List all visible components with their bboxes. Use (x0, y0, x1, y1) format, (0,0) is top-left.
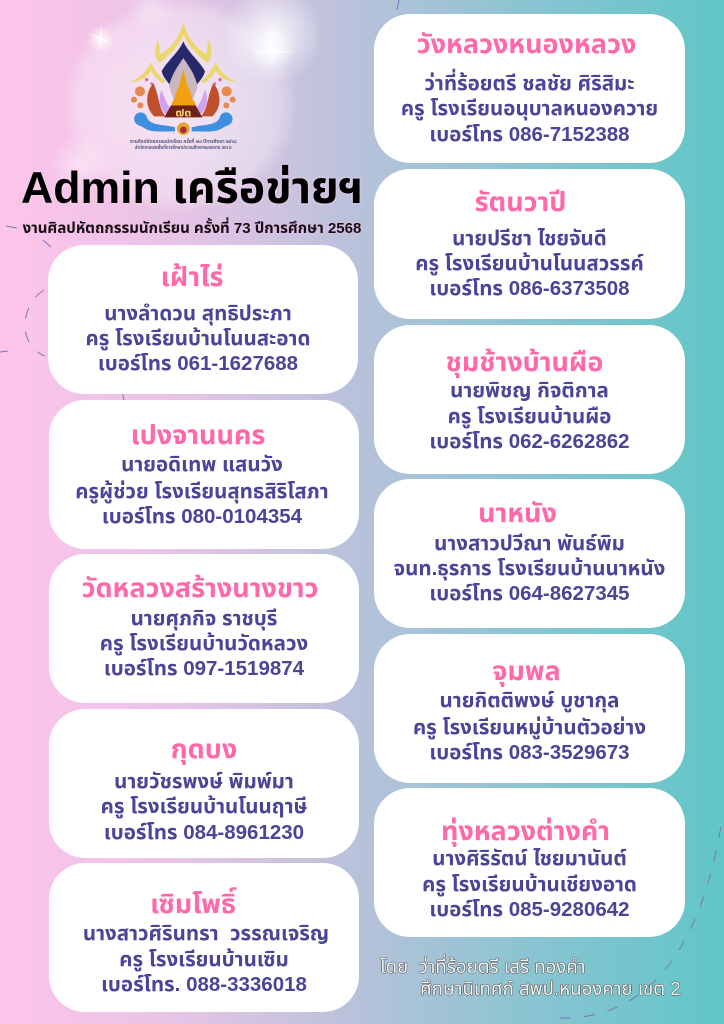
card: ทุ่งหลวงต่างคำ: นางศิริรัตน์ ไชยมานันต์ (432, 847, 627, 870)
card: เซิมโพธิ์ (49, 863, 359, 1012)
flowers (131, 86, 236, 108)
card: จุมพล: เบอร์โทร 083-3529673 (429, 741, 630, 764)
card: รัตนวาปี: รัตนวาปี (475, 187, 566, 217)
credit: author: โดย ว่าที่ร้อยตรี เสรี ทองคำ (380, 956, 585, 977)
subtitle: งานศิลปหัตถกรรมนักเรียน ครั้งที่ 73 ปีการศึกษา 2568 (23, 220, 361, 237)
card: เปงจานนคร: ครูผู้ช่วย โรงเรียนสุทธสิริโสภา (75, 480, 329, 503)
card: วัดหลวงสร้างนางขาว: เบอร์โทร 097-1519874 (104, 657, 304, 680)
card: เฝ้าไร่: เบอร์โทร 061-1627688 (98, 352, 298, 375)
emblem (177, 122, 190, 135)
card: จุมพล (374, 634, 685, 783)
card: เฝ้าไร่ (48, 245, 358, 394)
card: ชุมช้างบ้านผือ: เบอร์โทร 062-6262862 (429, 430, 630, 453)
card: นาหนัง (374, 479, 685, 628)
card: วังหลวงหนองหลวง: วังหลวงหนองหลวง (417, 29, 636, 59)
logo caption: งานศิลปหัตถกรรมนักเรียน ครั้งที่ ๗๓ ปีการศึกษา ๒๕๖๘ (130, 138, 237, 145)
card: กุดบง: ครู โรงเรียนบ้านโนนฤาษี (101, 795, 307, 818)
card: นาหนัง: นาหนัง (478, 498, 557, 528)
card: ทุ่งหลวงต่างคำ (374, 788, 685, 937)
card: นาหนัง: เบอร์โทร 064-8627345 (429, 582, 630, 605)
card: วังหลวงหนองหลวง: ว่าที่ร้อยตรี ชลชัย ศิริสิมะ (424, 72, 635, 95)
card: รัตนวาปี: เบอร์โทร 086-6373508 (429, 277, 630, 300)
card: เปงจานนคร: นายอดิเทพ แสนวัง (121, 453, 283, 476)
card: นาหนัง: จนท.ธุรการ โรงเรียนบ้านนาหนัง (394, 557, 665, 580)
card: กุดบง (49, 709, 359, 858)
card: เปงจานนคร: เปงจานนคร (131, 420, 265, 450)
card: เฝ้าไร่: นางลำดวน สุทธิประภา (104, 302, 292, 325)
gold roof (155, 21, 211, 63)
card: เซิมโพธิ์: เซิมโพธิ์ (150, 889, 236, 919)
card: เฝ้าไร่: เฝ้าไร่ (161, 262, 223, 292)
card: จุมพล: ครู โรงเรียนหมู่บ้านตัวอย่าง (413, 716, 646, 739)
gray ornament (169, 58, 198, 103)
card: เซิมโพธิ์: นางสาวศิรินทรา วรรณเจริญ (83, 922, 329, 945)
lotus leaves (147, 83, 219, 116)
credit: author (380, 954, 681, 999)
navy roof (162, 41, 205, 86)
card: เฝ้าไร่: ครู โรงเรียนบ้านโนนสะอาด (86, 327, 310, 350)
card: ทุ่งหลวงต่างคำ: ครู โรงเรียนบ้านเชียงอาด (422, 873, 637, 896)
base (164, 105, 202, 117)
card: ชุมช้างบ้านผือ (374, 325, 685, 474)
card: ชุมช้างบ้านผือ: นายพิชญ กิจติกาล (450, 379, 609, 402)
purple crescents (160, 90, 207, 115)
card: วัดหลวงสร้างนางขาว: วัดหลวงสร้างนางขาว (82, 573, 318, 603)
base numerals: ๗๓ (175, 105, 191, 119)
card: ชุมช้างบ้านผือ: ชุมช้างบ้านผือ (446, 347, 603, 377)
card: รัตนวาปี (374, 169, 685, 319)
credit: author: ศึกษานิเทศก์ สพป.หนองคาย เขต 2 (420, 978, 681, 999)
card: รัตนวาปี: นายปรีชา ไชยจันดี (452, 227, 607, 250)
card: เซิมโพธิ์: ครู โรงเรียนบ้านเซิม (119, 948, 289, 971)
title: Admin เครือข่ายฯ (21, 164, 363, 213)
card: เปงจานนคร: เบอร์โทร 080-0104354 (102, 505, 302, 528)
card: วัดหลวงสร้างนางขาว: ครู โรงเรียนบ้านวัดหลวง (100, 632, 308, 655)
card: จุมพล: นายกิตติพงษ์ บูชากุล (440, 689, 619, 712)
card: ทุ่งหลวงต่างคำ: ทุ่งหลวงต่างคำ (441, 816, 610, 846)
card: ชุมช้างบ้านผือ: ครู โรงเรียนบ้านผือ (448, 405, 611, 428)
card: วังหลวงหนองหลวง (374, 14, 685, 163)
card: รัตนวาปี: ครู โรงเรียนบ้านโนนสวรรค์ (415, 252, 644, 275)
card: วัดหลวงสร้างนางขาว (49, 554, 359, 703)
card: ทุ่งหลวงต่างคำ: เบอร์โทร 085-9280642 (429, 898, 630, 921)
card: กุดบง: กุดบง (171, 734, 237, 764)
card: จุมพล: จุมพล (492, 656, 561, 686)
card: กุดบง: นายวัชรพงษ์ พิมพ์มา (114, 770, 294, 793)
card: วังหลวงหนองหลวง: ครู โรงเรียนอนุบาลหนองควาย (401, 97, 658, 120)
buddha (171, 70, 196, 106)
logo: temple emblem (130, 22, 237, 151)
card: เปงจานนคร (49, 400, 359, 549)
card: นาหนัง: นางสาวปวีณา พันธ์พิม (434, 532, 625, 555)
side roofs (130, 62, 237, 83)
card: เซิมโพธิ์: เบอร์โทร. 088-3336018 (101, 973, 307, 996)
card: วังหลวงหนองหลวง: เบอร์โทร 086-7152388 (429, 123, 630, 146)
card: กุดบง: เบอร์โทร 084-8961230 (104, 821, 304, 844)
card: วัดหลวงสร้างนางขาว: นายศุภกิจ ราชบุรี (131, 607, 277, 630)
blue waves (134, 112, 233, 132)
